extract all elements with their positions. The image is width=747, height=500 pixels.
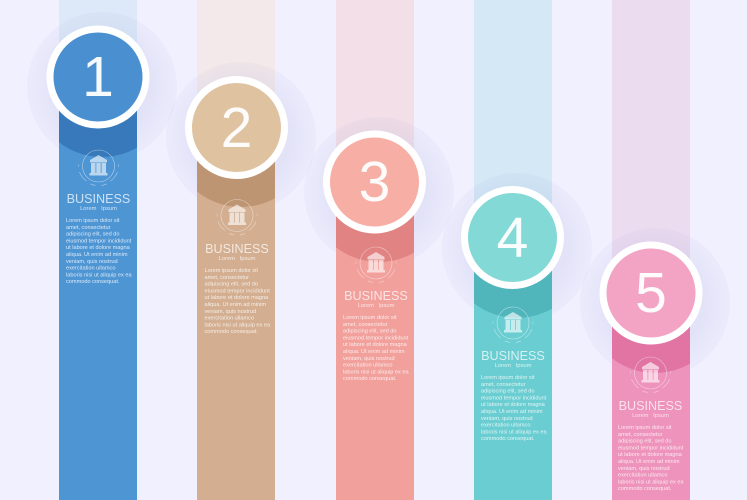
step 1 body text: laboris nisi ut aliquip ex ea <box>66 272 132 278</box>
step 1 solid band <box>59 77 137 500</box>
step 2 body text: ut labore et dolore magna <box>204 295 269 301</box>
step 3 body text: eiusmod tempor incididunt <box>343 335 409 341</box>
step 1 body text: eiusmod tempor incididunt <box>66 238 132 244</box>
step 5 body text: amet, consectetur <box>618 432 663 438</box>
step 5 column <box>588 0 722 500</box>
step 1 halo <box>27 12 177 162</box>
step 2 band shadow <box>197 160 275 207</box>
step 1 number badge <box>50 29 146 125</box>
step 3 icon: bank <box>356 247 396 282</box>
step 3 body text: exercitation ullamco <box>343 363 392 369</box>
step 5 body text: aliqua. Ut enim ad minim <box>618 459 680 465</box>
step 2 body text: laboris nisi ut aliquip ex ea <box>204 322 271 328</box>
step 5 body text: ut labore et dolore magna <box>618 452 683 458</box>
step 5 band shadow <box>612 326 690 373</box>
step 4 number badge <box>464 190 560 286</box>
step 5 body text: commodo consequat. <box>618 486 672 492</box>
step 2 body text: eiusmod tempor incididunt <box>204 288 270 294</box>
step 1 body text: amet, consectetur <box>66 225 111 231</box>
step 1 band shadow <box>59 110 137 157</box>
step 2 body text: veniam, quis nostrud <box>204 309 256 315</box>
step 3 pale band <box>336 0 414 205</box>
step 4 body text: ut labore et dolore magna <box>481 402 546 408</box>
step 5 icon: bank <box>630 357 670 392</box>
step 3 body text: veniam, quis nostrud <box>343 356 395 362</box>
step 1 body text: ut labore et dolore magna <box>66 245 131 251</box>
step 4 body text: laboris nisi ut aliquip ex ea <box>481 429 547 435</box>
step 4 icon: bank <box>493 307 533 342</box>
step 2 number badge: 2 <box>221 96 252 160</box>
step 5 number badge: 5 <box>635 261 667 325</box>
step 1 body text: adipiscing elit, sed do <box>66 232 120 238</box>
step 2 body text: commodo consequat. <box>204 329 258 335</box>
step 2 body text: adipiscing elit, sed do <box>204 282 258 288</box>
step 1 body text: Lorem ipsum dolor sit <box>66 218 120 224</box>
step 1 body text: veniam, quis nostrud <box>66 259 118 265</box>
step 5 solid band <box>612 293 690 500</box>
step 3 body text: commodo consequat. <box>343 376 397 382</box>
step 5 body text: veniam, quis nostrud <box>618 466 670 472</box>
step 1 body text: commodo consequat. <box>66 279 120 285</box>
step 4 number badge: 4 <box>497 206 528 270</box>
step 5 body text: eiusmod tempor incididunt <box>618 445 684 451</box>
step 4 body text: Lorem ipsum dolor sit <box>481 375 535 381</box>
step 4 body text: adipiscing elit, sed do <box>481 389 534 395</box>
step 3 subheading: Lorem Ipsum <box>358 303 395 309</box>
step 2 heading: BUSINESS <box>205 242 269 256</box>
step 5 body text: exercitation ullamco <box>618 473 667 479</box>
step 3 halo <box>304 117 454 267</box>
step 5 body text: adipiscing elit, sed do <box>618 439 672 445</box>
step 5 halo <box>580 228 730 378</box>
step 5 number badge <box>603 245 699 341</box>
step 4 halo <box>442 173 592 323</box>
step 1 icon: bank <box>78 150 118 186</box>
step 1 body text: aliqua. Ut enim ad minim <box>66 252 128 258</box>
step 1 subheading: Lorem Ipsum <box>80 206 117 212</box>
step 5 heading: BUSINESS <box>619 399 682 413</box>
step 5 pale band <box>612 0 690 315</box>
step 1 heading: BUSINESS <box>67 192 130 206</box>
step 5 subheading: Lorem Ipsum <box>632 413 669 419</box>
step 4 body text: commodo consequat. <box>481 436 535 442</box>
step 4 body text: veniam, quis nostrud <box>481 416 533 422</box>
step 5 body text: Lorem ipsum dolor sit <box>618 425 672 431</box>
step 2 body text: exercitation ullamco <box>204 316 254 322</box>
step 4 band shadow <box>474 270 552 318</box>
step 4 pale band <box>474 0 552 260</box>
step 3 column <box>312 0 446 500</box>
step 2 halo <box>166 62 316 212</box>
step 2 pale band <box>197 0 275 150</box>
step 3 heading: BUSINESS <box>344 289 408 303</box>
step 2 body text: amet, consectetur <box>204 275 249 281</box>
step 2 icon: bank <box>217 200 257 235</box>
step 3 body text: aliqua. Ut enim ad minim <box>343 349 405 355</box>
step 4 body text: aliqua. Ut enim ad minim <box>481 409 543 415</box>
step 4 body text: exercitation ullamco <box>481 423 530 429</box>
step 3 body text: Lorem ipsum dolor sit <box>343 315 397 321</box>
step 4 subheading: Lorem Ipsum <box>495 363 532 369</box>
step 1 column <box>35 0 168 500</box>
step 2 body text: Lorem ipsum dolor sit <box>204 268 258 274</box>
step 2 number badge <box>188 80 284 176</box>
step 4 body text: eiusmod tempor incididunt <box>481 395 547 401</box>
step 3 body text: adipiscing elit, sed do <box>343 329 396 335</box>
step 3 band shadow <box>336 215 414 262</box>
step 3 number badge: 3 <box>359 150 390 214</box>
step 4 column <box>450 0 584 500</box>
step 5 body text: laboris nisi ut aliquip ex ea <box>618 479 684 485</box>
step 3 number badge <box>326 134 422 230</box>
step 3 solid band <box>336 182 414 500</box>
step 1 body text: exercitation ullamco <box>66 266 115 272</box>
step 4 solid band <box>474 238 552 500</box>
step 1 number badge: 1 <box>82 45 114 109</box>
step 4 body text: amet, consectetur <box>481 382 526 388</box>
step 3 body text: ut labore et dolore magna <box>343 342 408 348</box>
step 2 solid band <box>197 127 275 500</box>
step 2 subheading: Lorem Ipsum <box>219 256 256 262</box>
step 3 body text: amet, consectetur <box>343 322 388 328</box>
step 1 pale band <box>59 0 137 100</box>
step 2 column <box>174 0 308 500</box>
step 2 body text: aliqua. Ut enim ad minim <box>204 302 266 308</box>
step 4 heading: BUSINESS <box>481 349 545 363</box>
step 3 body text: laboris nisi ut aliquip ex ea <box>343 369 409 375</box>
